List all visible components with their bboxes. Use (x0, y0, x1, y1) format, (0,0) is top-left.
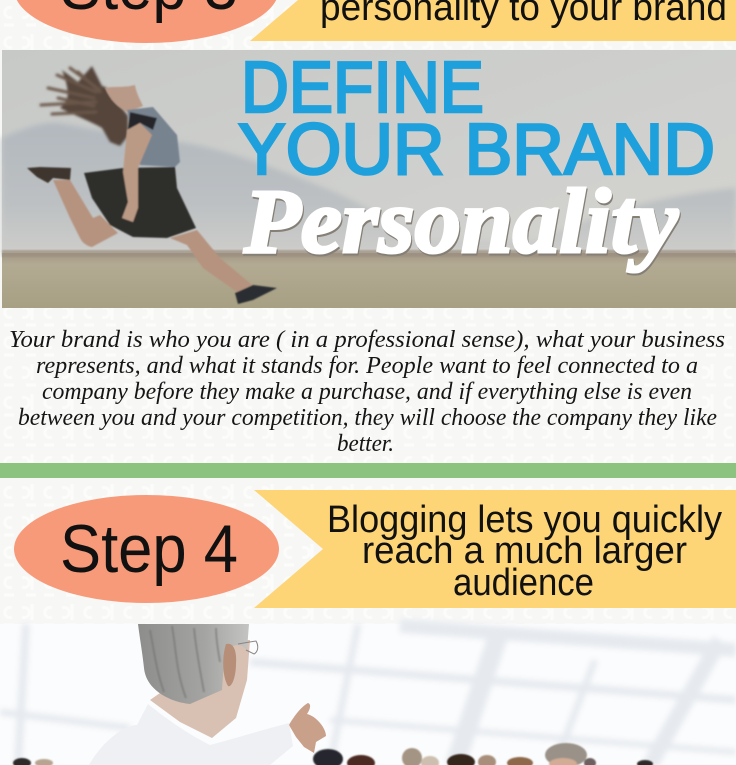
woman front shoe (235, 285, 277, 304)
presenter ear (223, 644, 236, 686)
step 4 ribbon text (327, 499, 722, 604)
body paragraph: better. (337, 431, 394, 457)
body paragraph: company before they make a purchase, and if everything else is even (42, 379, 692, 405)
presenter shirt (89, 704, 293, 765)
green divider (0, 463, 736, 478)
photo: define your brand personality (2, 48, 736, 308)
photo sky (2, 50, 736, 308)
woman back shoe (27, 167, 71, 183)
step 3 header (14, 0, 736, 43)
woman sleeve (128, 112, 157, 130)
woman back leg (53, 180, 118, 247)
woman hair (41, 66, 128, 146)
step 4 ribbon text: audience (453, 562, 594, 604)
woman jumping (27, 66, 277, 304)
step 4 ribbon text: reach a much larger (362, 530, 687, 572)
body paragraph: represents, and what it stands for. People want to feel connected to a (36, 353, 698, 379)
headline: personality: Personality (243, 170, 679, 272)
presenter neck and face (150, 640, 250, 738)
step 4 header (14, 490, 736, 608)
step 4 oval (14, 495, 279, 603)
step 3 oval (14, 0, 279, 43)
blurred window frame (0, 624, 736, 765)
woman front leg (170, 230, 252, 292)
photo field (2, 253, 736, 308)
woman head (105, 85, 143, 112)
headline: personality: Personality (244, 172, 680, 274)
step 4 ribbon (254, 490, 736, 608)
presenter glasses (238, 641, 258, 654)
body paragraph: between you and your competition, they will choose the company they like (18, 405, 717, 431)
presenter hand (289, 703, 326, 753)
step 4 ribbon text: Blogging lets you quickly (327, 499, 722, 541)
presenter (89, 624, 326, 765)
photo background (0, 624, 736, 765)
woman top (127, 107, 180, 167)
body paragraph: Your brand is who you are ( in a professional sense), what your business (9, 327, 725, 353)
photo mountains (2, 123, 736, 254)
headline: define: DEFINE (241, 48, 484, 128)
step 3 ribbon (250, 0, 736, 41)
headline: your brand: YOUR BRAND (238, 110, 715, 190)
presenter hair (138, 624, 249, 704)
body paragraph (9, 327, 725, 457)
step 4 label: Step 4 (60, 511, 238, 587)
woman arm (122, 123, 152, 222)
audience heads (13, 743, 653, 765)
woman skirt (84, 167, 196, 238)
photo: presenter and audience (0, 624, 736, 765)
